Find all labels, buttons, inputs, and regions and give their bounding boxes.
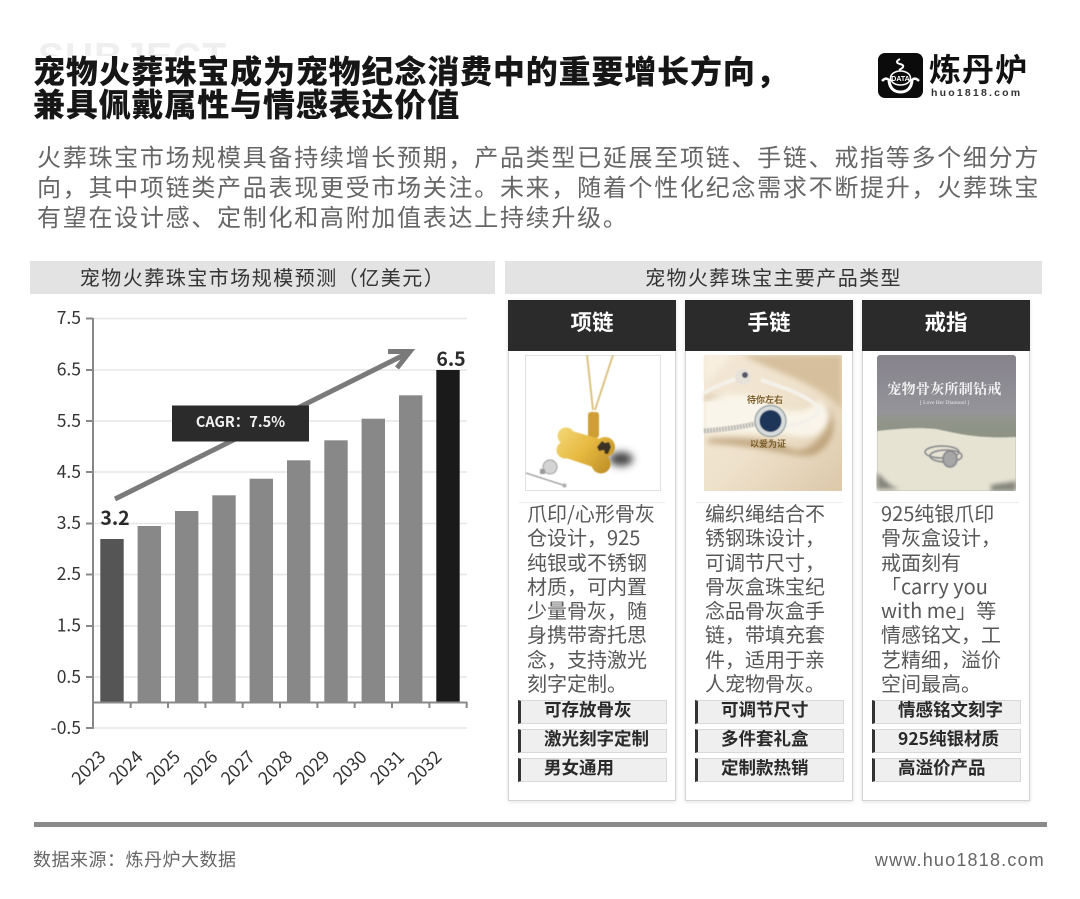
arrow: growth trend bbox=[115, 352, 410, 499]
bracelet description: 链，带填充套 bbox=[705, 619, 825, 648]
tag: 925纯银材质 bbox=[898, 726, 999, 751]
tag bbox=[695, 729, 844, 753]
intro paragraph bbox=[37, 138, 1040, 233]
bracelet header bbox=[685, 300, 853, 351]
x axis labels: 2027 bbox=[215, 745, 260, 790]
panel heading: market forecast bbox=[30, 261, 495, 294]
y axis labels: -0.5 bbox=[51, 715, 81, 740]
tag bbox=[695, 758, 844, 782]
bracelet photo: 待你左右 bbox=[747, 393, 783, 406]
data source: 数据来源：炼丹炉大数据 bbox=[33, 846, 236, 872]
callout: CAGR bbox=[172, 406, 309, 442]
tag bbox=[518, 729, 667, 753]
tag bbox=[872, 758, 1021, 782]
callout: CAGR: CAGR：7.5% bbox=[196, 411, 285, 432]
brand logo bbox=[878, 45, 1028, 99]
ring description: 骨灰盒设计， bbox=[881, 522, 1001, 551]
necklace description: 仓设计，925 bbox=[527, 522, 640, 551]
x axis labels: 2030 bbox=[327, 745, 372, 790]
bracelet photo: 以爱为证 bbox=[750, 437, 786, 450]
bracelet photo bbox=[702, 355, 842, 491]
x axis labels: 2032 bbox=[402, 745, 447, 790]
y axis labels: 1.5 bbox=[57, 612, 81, 638]
tag: 高溢价产品 bbox=[898, 755, 986, 780]
ring photo: [ Love Her Diamond ] bbox=[920, 400, 969, 406]
necklace header: 项链 bbox=[570, 306, 614, 337]
necklace description: 纯银或不锈钢 bbox=[527, 547, 647, 576]
panel heading: product types bbox=[505, 261, 1042, 294]
y axis labels: 0.5 bbox=[57, 664, 81, 689]
tag: 激光刻字定制 bbox=[544, 726, 649, 751]
value label 2023: 3.2 bbox=[100, 502, 130, 531]
tag: 定制款热销 bbox=[721, 755, 808, 780]
ring description: 925纯银爪印 bbox=[881, 498, 994, 527]
ring description: 艺精细，溢价 bbox=[881, 644, 1001, 673]
title line 2: 兼具佩戴属性与情感表达价值 bbox=[33, 80, 460, 126]
x axis labels: 2026 bbox=[178, 745, 223, 790]
bracelet header: 手链 bbox=[747, 306, 790, 337]
bracelet description: 锈钢珠设计， bbox=[705, 522, 825, 551]
title line 1: 宠物火葬珠宝成为宠物纪念消费中的重要增长方向， bbox=[33, 47, 789, 93]
ring header bbox=[862, 300, 1030, 351]
x axis labels: 2024 bbox=[103, 745, 148, 790]
necklace description: 身携带寄托思 bbox=[527, 619, 647, 648]
bracelet description: 编织绳结合不 bbox=[705, 498, 825, 527]
bar chart: market size forecast bbox=[51, 305, 468, 790]
website url: www.huo1818.com bbox=[875, 850, 1045, 870]
ring description: 空间最高。 bbox=[881, 668, 981, 697]
ring description: 「carry you bbox=[881, 571, 988, 600]
tag bbox=[872, 700, 1021, 724]
bracelet description: 骨灰盒珠宝纪 bbox=[705, 571, 825, 600]
tag: 情感铭文刻字 bbox=[898, 697, 1003, 722]
bracelet description: 念品骨灰盒手 bbox=[705, 595, 825, 624]
ring description bbox=[881, 498, 1001, 697]
x axis labels: 2025 bbox=[140, 745, 186, 790]
y axis labels: 2.5 bbox=[57, 561, 81, 586]
tag: 可调节尺寸 bbox=[721, 697, 808, 722]
tag: 多件套礼盒 bbox=[721, 726, 808, 751]
bracelet description: 件，适用于亲 bbox=[705, 644, 825, 673]
panel heading: product types: 宠物火葬珠宝主要产品类型 bbox=[645, 262, 902, 291]
ring description: with me」等 bbox=[881, 595, 996, 624]
necklace header bbox=[508, 300, 676, 351]
ring photo bbox=[876, 355, 1016, 491]
title bbox=[33, 47, 789, 126]
necklace description: 少量骨灰，随 bbox=[527, 595, 647, 624]
footer divider bbox=[34, 822, 1047, 827]
necklace description: 材质，可内置 bbox=[527, 571, 647, 600]
logo wordmark: 炼丹炉 bbox=[929, 45, 1028, 91]
divider rule bbox=[873, 502, 1019, 503]
bars bbox=[100, 370, 460, 702]
icon: steaming cup bbox=[878, 53, 923, 98]
panel heading: market forecast: 宠物火葬珠宝市场规模预测（亿美元） bbox=[80, 262, 445, 291]
panel: necklace bbox=[508, 300, 676, 801]
intro paragraph: 向，其中项链类产品表现更受市场关注。未来，随着个性化纪念需求不断提升，火葬珠宝 bbox=[37, 168, 1040, 203]
y axis labels: 3.5 bbox=[57, 510, 81, 535]
tag: 可存放骨灰 bbox=[544, 697, 632, 722]
tag bbox=[518, 758, 667, 782]
necklace description: 念，支持激光 bbox=[527, 644, 647, 673]
y axis labels: 6.5 bbox=[57, 356, 81, 382]
x axis labels bbox=[66, 745, 447, 790]
y axis labels: 4.5 bbox=[57, 459, 81, 484]
divider rule bbox=[519, 502, 665, 503]
tag bbox=[872, 729, 1021, 753]
ring photo: 宠物骨灰所制钻戒 bbox=[887, 379, 1002, 399]
bracelet description: 人宠物骨灰。 bbox=[705, 668, 825, 697]
y axis labels: 5.5 bbox=[57, 408, 81, 433]
tag bbox=[695, 700, 844, 724]
bracelet description: 可调节尺寸， bbox=[705, 547, 825, 576]
value label 2032: 6.5 bbox=[436, 343, 466, 372]
y axis labels: 7.5 bbox=[57, 305, 81, 330]
necklace photo bbox=[525, 355, 661, 491]
necklace description bbox=[527, 498, 655, 697]
tag: 男女通用 bbox=[544, 755, 614, 780]
logo url: huo1818.com bbox=[931, 87, 1022, 99]
bracelet description bbox=[705, 498, 825, 697]
intro paragraph: 有望在设计感、定制化和高附加值表达上持续升级。 bbox=[37, 198, 629, 233]
axes bbox=[86, 318, 467, 729]
necklace description: 爪印/心形骨灰 bbox=[527, 498, 655, 527]
icon: steaming cup: DATA bbox=[891, 76, 910, 83]
x axis labels: 2028 bbox=[252, 745, 298, 790]
panel: bracelet bbox=[685, 300, 853, 801]
intro paragraph: 火葬珠宝市场规模具备持续增长预期，产品类型已延展至项链、手链、戒指等多个细分方 bbox=[37, 138, 1040, 173]
divider rule bbox=[696, 502, 842, 503]
necklace description: 刻字定制。 bbox=[527, 668, 627, 697]
ring description: 情感铭文，工 bbox=[881, 619, 1001, 648]
y axis labels bbox=[51, 305, 81, 740]
tag bbox=[518, 700, 667, 724]
panel: ring bbox=[862, 300, 1030, 801]
ring description: 戒面刻有 bbox=[881, 547, 961, 576]
x axis labels: 2023 bbox=[66, 745, 111, 790]
x axis labels: 2031 bbox=[364, 745, 410, 790]
x axis labels: 2029 bbox=[290, 745, 335, 790]
ring header: 戒指 bbox=[924, 306, 968, 337]
